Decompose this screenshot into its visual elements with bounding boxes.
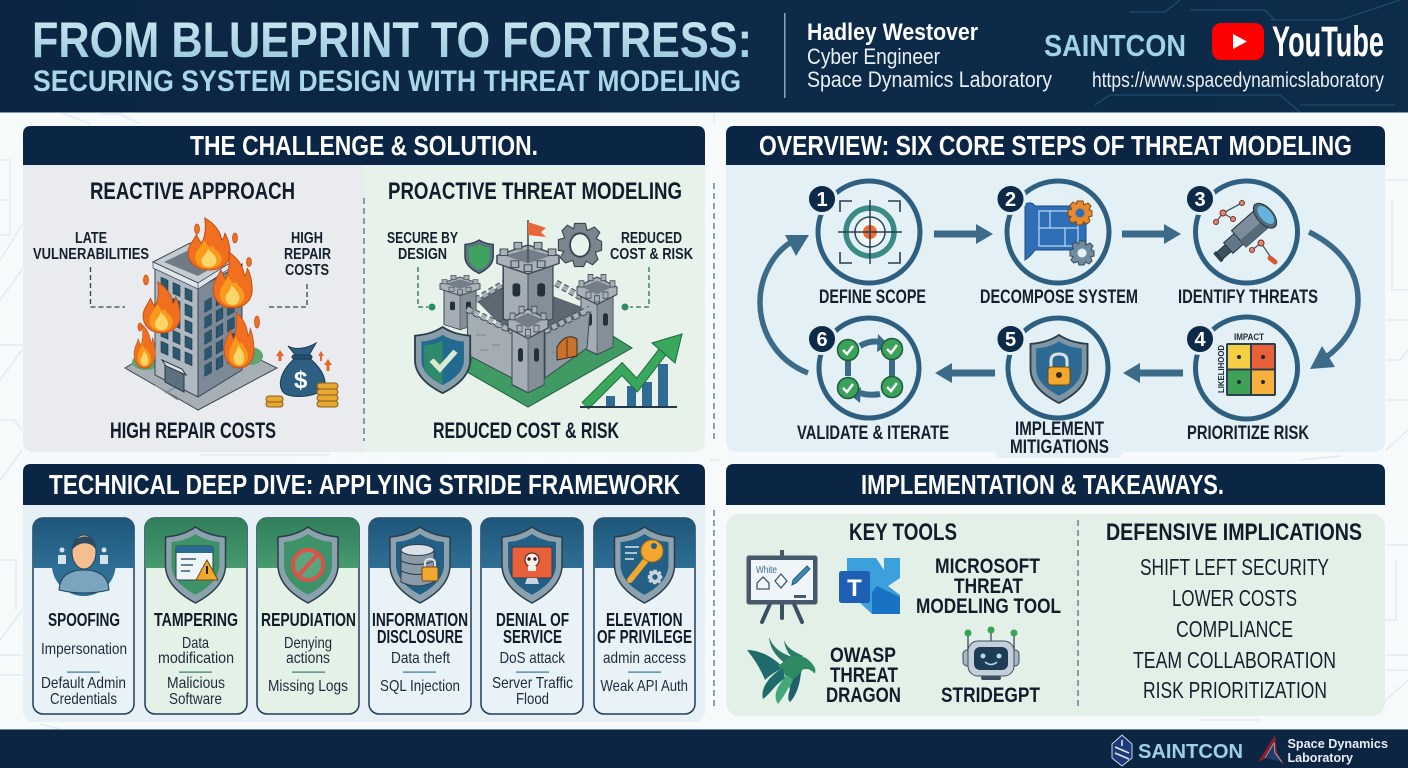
card: spoofing bbox=[33, 518, 134, 714]
SAINTCON wordmark: SAINTCON bbox=[1044, 28, 1186, 63]
heading: key tools: KEY TOOLS bbox=[849, 519, 957, 546]
panel: challenge and solution bbox=[23, 0, 705, 452]
heading: implementation and takeaways bbox=[726, 464, 1385, 505]
heading: STRIDE framework bbox=[23, 464, 705, 505]
card: spoofing: Credentials bbox=[50, 691, 117, 708]
icon: whiteboard: White bbox=[756, 565, 777, 576]
card: spoofing: Impersonation bbox=[41, 641, 127, 658]
step 5: implement mitigations bbox=[996, 318, 1109, 458]
list: defensive implications: LOWER COSTS bbox=[1172, 585, 1297, 611]
label: Microsoft Threat Modeling Tool: MICROSOFT bbox=[935, 555, 1040, 578]
callout: secure by design: SECURE BY bbox=[387, 230, 458, 247]
card: denial of service: Flood bbox=[516, 691, 549, 708]
callout: reduced cost and risk bbox=[610, 230, 693, 310]
label: Space Dynamics Laboratory: Space Dynamics bbox=[1288, 736, 1388, 751]
card: denial of service: DoS attack bbox=[500, 650, 566, 667]
step 2: decompose system bbox=[980, 181, 1138, 308]
icon: money bag and coins bbox=[266, 343, 338, 407]
card: information disclosure: SQL Injection bbox=[380, 678, 460, 695]
card: elevation of privilege bbox=[594, 518, 695, 714]
caption: high repair costs: HIGH REPAIR COSTS bbox=[110, 418, 276, 443]
heading: implementation and takeaways: IMPLEMENTATION & TAKEAWAYS. bbox=[861, 469, 1224, 500]
card: repudiation: actions bbox=[286, 650, 330, 667]
card: repudiation: Missing Logs bbox=[268, 678, 348, 695]
icon: money bag and coins: $ bbox=[294, 367, 308, 394]
panel: STRIDE framework bbox=[23, 464, 705, 722]
callout: reduced cost and risk: COST & RISK bbox=[610, 246, 693, 263]
callout: high repair costs bbox=[269, 230, 331, 307]
step 6: validate and iterate bbox=[797, 318, 949, 444]
heading: STRIDE framework: TECHNICAL DEEP DIVE: APPLYING STRIDE FRAMEWORK bbox=[49, 469, 680, 500]
card: information disclosure bbox=[369, 518, 471, 714]
callout: secure by design bbox=[387, 230, 458, 310]
step 4: prioritize risk: 4 bbox=[1194, 329, 1206, 351]
heading: challenge and solution: THE CHALLENGE & SOLUTION. bbox=[190, 130, 538, 161]
label: Microsoft Threat Modeling Tool: MODELING TOOL bbox=[916, 595, 1061, 618]
arrow: left return curve bbox=[760, 235, 809, 373]
arrows: step flow bbox=[934, 224, 1183, 383]
icon: rising cost reduction arrow bbox=[580, 334, 682, 408]
heading: reactive approach: REACTIVE APPROACH bbox=[90, 178, 295, 205]
list: defensive implications bbox=[1133, 554, 1336, 703]
card: denial of service bbox=[481, 518, 583, 714]
card: elevation of privilege: ELEVATION bbox=[606, 610, 682, 630]
speaker info: Space Dynamics Laboratory bbox=[807, 67, 1052, 92]
card: information disclosure: INFORMATION bbox=[372, 610, 468, 630]
icon: OWASP Threat Dragon logo bbox=[747, 637, 815, 704]
step 1: define scope: DEFINE SCOPE bbox=[819, 287, 926, 308]
icon: YouTube logo bbox=[1212, 18, 1384, 66]
callout: late vulnerabilities: VULNERABILITIES bbox=[33, 246, 149, 263]
card: repudiation: Denying bbox=[284, 635, 332, 652]
card: elevation of privilege: Weak API Auth bbox=[600, 678, 688, 695]
card: tampering bbox=[145, 518, 247, 714]
step 4: prioritize risk bbox=[1186, 317, 1309, 444]
step 3: identify threats bbox=[1178, 181, 1318, 308]
card: spoofing: Default Admin bbox=[41, 675, 126, 692]
step 4: prioritize risk: PRIORITIZE RISK bbox=[1187, 423, 1309, 444]
icon: whiteboard bbox=[746, 550, 818, 622]
card: tampering: modification bbox=[158, 650, 234, 667]
icon: StrideGPT robot bbox=[963, 626, 1019, 680]
card: spoofing: SPOOFING bbox=[48, 610, 120, 630]
card: repudiation bbox=[257, 518, 359, 714]
callout: secure by design: DESIGN bbox=[398, 246, 447, 263]
step 3: identify threats: 3 bbox=[1194, 189, 1206, 211]
label: OWASP Threat Dragon: THREAT bbox=[830, 664, 898, 687]
step 2: decompose system: DECOMPOSE SYSTEM bbox=[980, 287, 1138, 308]
card: tampering: Software bbox=[169, 691, 222, 708]
icon: Microsoft Threat Modeling Tool logo: T bbox=[847, 575, 862, 602]
step 5: implement mitigations: IMPLEMENT bbox=[1015, 419, 1104, 440]
callout: high repair costs: COSTS bbox=[285, 262, 329, 279]
card: repudiation: REPUDIATION bbox=[261, 610, 356, 630]
title: FROM BLUEPRINT TO FORTRESS: bbox=[32, 12, 752, 68]
icon: Microsoft Threat Modeling Tool logo bbox=[839, 558, 900, 614]
speaker info bbox=[807, 19, 1052, 92]
icon: Space Dynamics Laboratory logo bbox=[1258, 735, 1284, 765]
step 6: validate and iterate: VALIDATE & ITERATE bbox=[797, 423, 949, 444]
arrow: right return curve bbox=[1309, 232, 1358, 369]
callout: reduced cost and risk: REDUCED bbox=[621, 230, 682, 247]
card: elevation of privilege: OF PRIVILEGE bbox=[597, 627, 692, 647]
header banner bbox=[0, 0, 1408, 113]
label: OWASP Threat Dragon bbox=[826, 644, 901, 707]
card: denial of service: Server Traffic bbox=[492, 675, 573, 692]
callout: high repair costs: REPAIR bbox=[284, 246, 331, 263]
step 5: implement mitigations: MITIGATIONS bbox=[1010, 437, 1109, 458]
subtitle: SECURING SYSTEM DESIGN WITH THREAT MODELING bbox=[33, 65, 741, 98]
card: denial of service: DENIAL OF bbox=[496, 610, 569, 630]
caption: reduced cost and risk: REDUCED COST & RISK bbox=[433, 418, 619, 443]
callout: late vulnerabilities bbox=[33, 230, 149, 307]
heading: challenge and solution bbox=[23, 126, 705, 165]
label: OWASP Threat Dragon: OWASP bbox=[830, 644, 896, 667]
list: defensive implications: TEAM COLLABORATION bbox=[1133, 647, 1336, 673]
panel: implementation and takeaways bbox=[726, 514, 1385, 716]
speaker info: Cyber Engineer bbox=[807, 44, 940, 69]
label: StrideGPT: STRIDEGPT bbox=[941, 684, 1040, 707]
label: SAINTCON: SAINTCON bbox=[1138, 741, 1243, 763]
card: tampering: TAMPERING bbox=[154, 610, 238, 630]
list: defensive implications: SHIFT LEFT SECURITY bbox=[1140, 554, 1329, 580]
footer bar bbox=[0, 729, 1408, 768]
icon: burning building bbox=[125, 218, 277, 410]
card: information disclosure: DISCLOSURE bbox=[377, 627, 463, 647]
step 4: prioritize risk: IMPACT bbox=[1234, 332, 1264, 342]
card: tampering: Malicious bbox=[167, 675, 225, 692]
card: elevation of privilege: admin access bbox=[603, 650, 686, 667]
step 4: prioritize risk: LIKELIHOOD bbox=[1217, 345, 1226, 393]
step 1: define scope: 1 bbox=[816, 189, 828, 211]
callout: high repair costs: HIGH bbox=[291, 230, 323, 247]
step 1: define scope bbox=[808, 181, 926, 308]
label: OWASP Threat Dragon: DRAGON bbox=[826, 684, 901, 707]
icon: fortress castle bbox=[415, 0, 632, 407]
list: defensive implications: COMPLIANCE bbox=[1176, 616, 1293, 642]
card: information disclosure: Data theft bbox=[391, 650, 450, 667]
heading: proactive threat modeling: PROACTIVE THREAT MODELING bbox=[388, 178, 682, 205]
speaker info: Hadley Westover bbox=[807, 19, 978, 46]
card: denial of service: SERVICE bbox=[503, 627, 562, 647]
step 2: decompose system: 2 bbox=[1005, 189, 1016, 211]
list: defensive implications: RISK PRIORITIZATION bbox=[1143, 677, 1327, 703]
callout: late vulnerabilities: LATE bbox=[75, 230, 107, 247]
step 3: identify threats: IDENTIFY THREATS bbox=[1178, 287, 1318, 308]
label: Space Dynamics Laboratory bbox=[1288, 736, 1388, 765]
step 5: implement mitigations: 5 bbox=[1005, 329, 1016, 351]
step 6: validate and iterate: 6 bbox=[816, 329, 828, 351]
label: Space Dynamics Laboratory: Laboratory bbox=[1288, 750, 1354, 765]
label: Microsoft Threat Modeling Tool: THREAT bbox=[954, 575, 1023, 598]
label: Microsoft Threat Modeling Tool bbox=[916, 555, 1061, 618]
icon: SAINTCON shield bbox=[1112, 735, 1132, 766]
panel: six core steps bbox=[726, 126, 1385, 458]
card: tampering: Data bbox=[182, 635, 209, 652]
